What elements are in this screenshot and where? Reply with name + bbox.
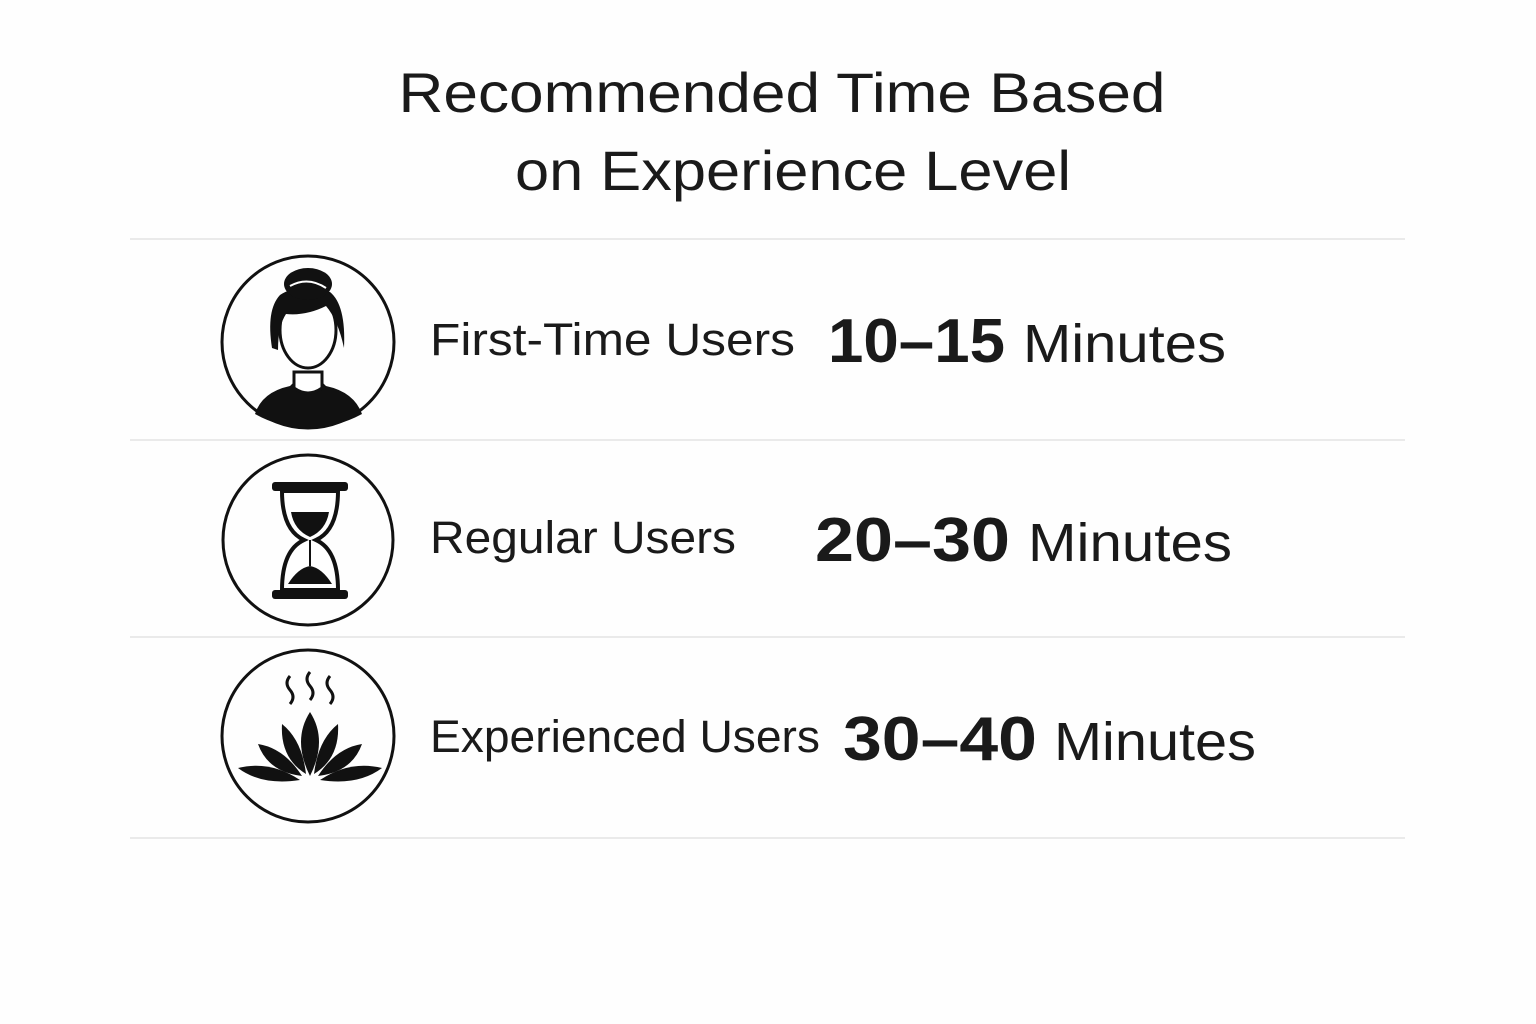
icon: lotus — [222, 650, 394, 822]
value: Minutes — [1023, 314, 1226, 374]
title: on Experience Level — [515, 139, 1071, 202]
icon: person — [222, 256, 394, 428]
row: experienced users — [222, 650, 1256, 822]
label: First-Time Users — [430, 314, 795, 365]
label: Regular Users — [430, 512, 736, 563]
value: Minutes — [1028, 513, 1232, 573]
value: 20–30 — [815, 506, 1010, 575]
row: regular users — [223, 455, 1232, 625]
icon: hourglass — [223, 455, 393, 625]
title: Recommended Time Based — [398, 61, 1166, 124]
row: first-time users — [222, 256, 1226, 428]
value: 10–15 — [828, 307, 1005, 376]
title — [398, 61, 1166, 202]
label: Experienced Users — [430, 711, 820, 762]
value: Minutes — [1054, 712, 1256, 772]
value: 30–40 — [843, 705, 1037, 774]
